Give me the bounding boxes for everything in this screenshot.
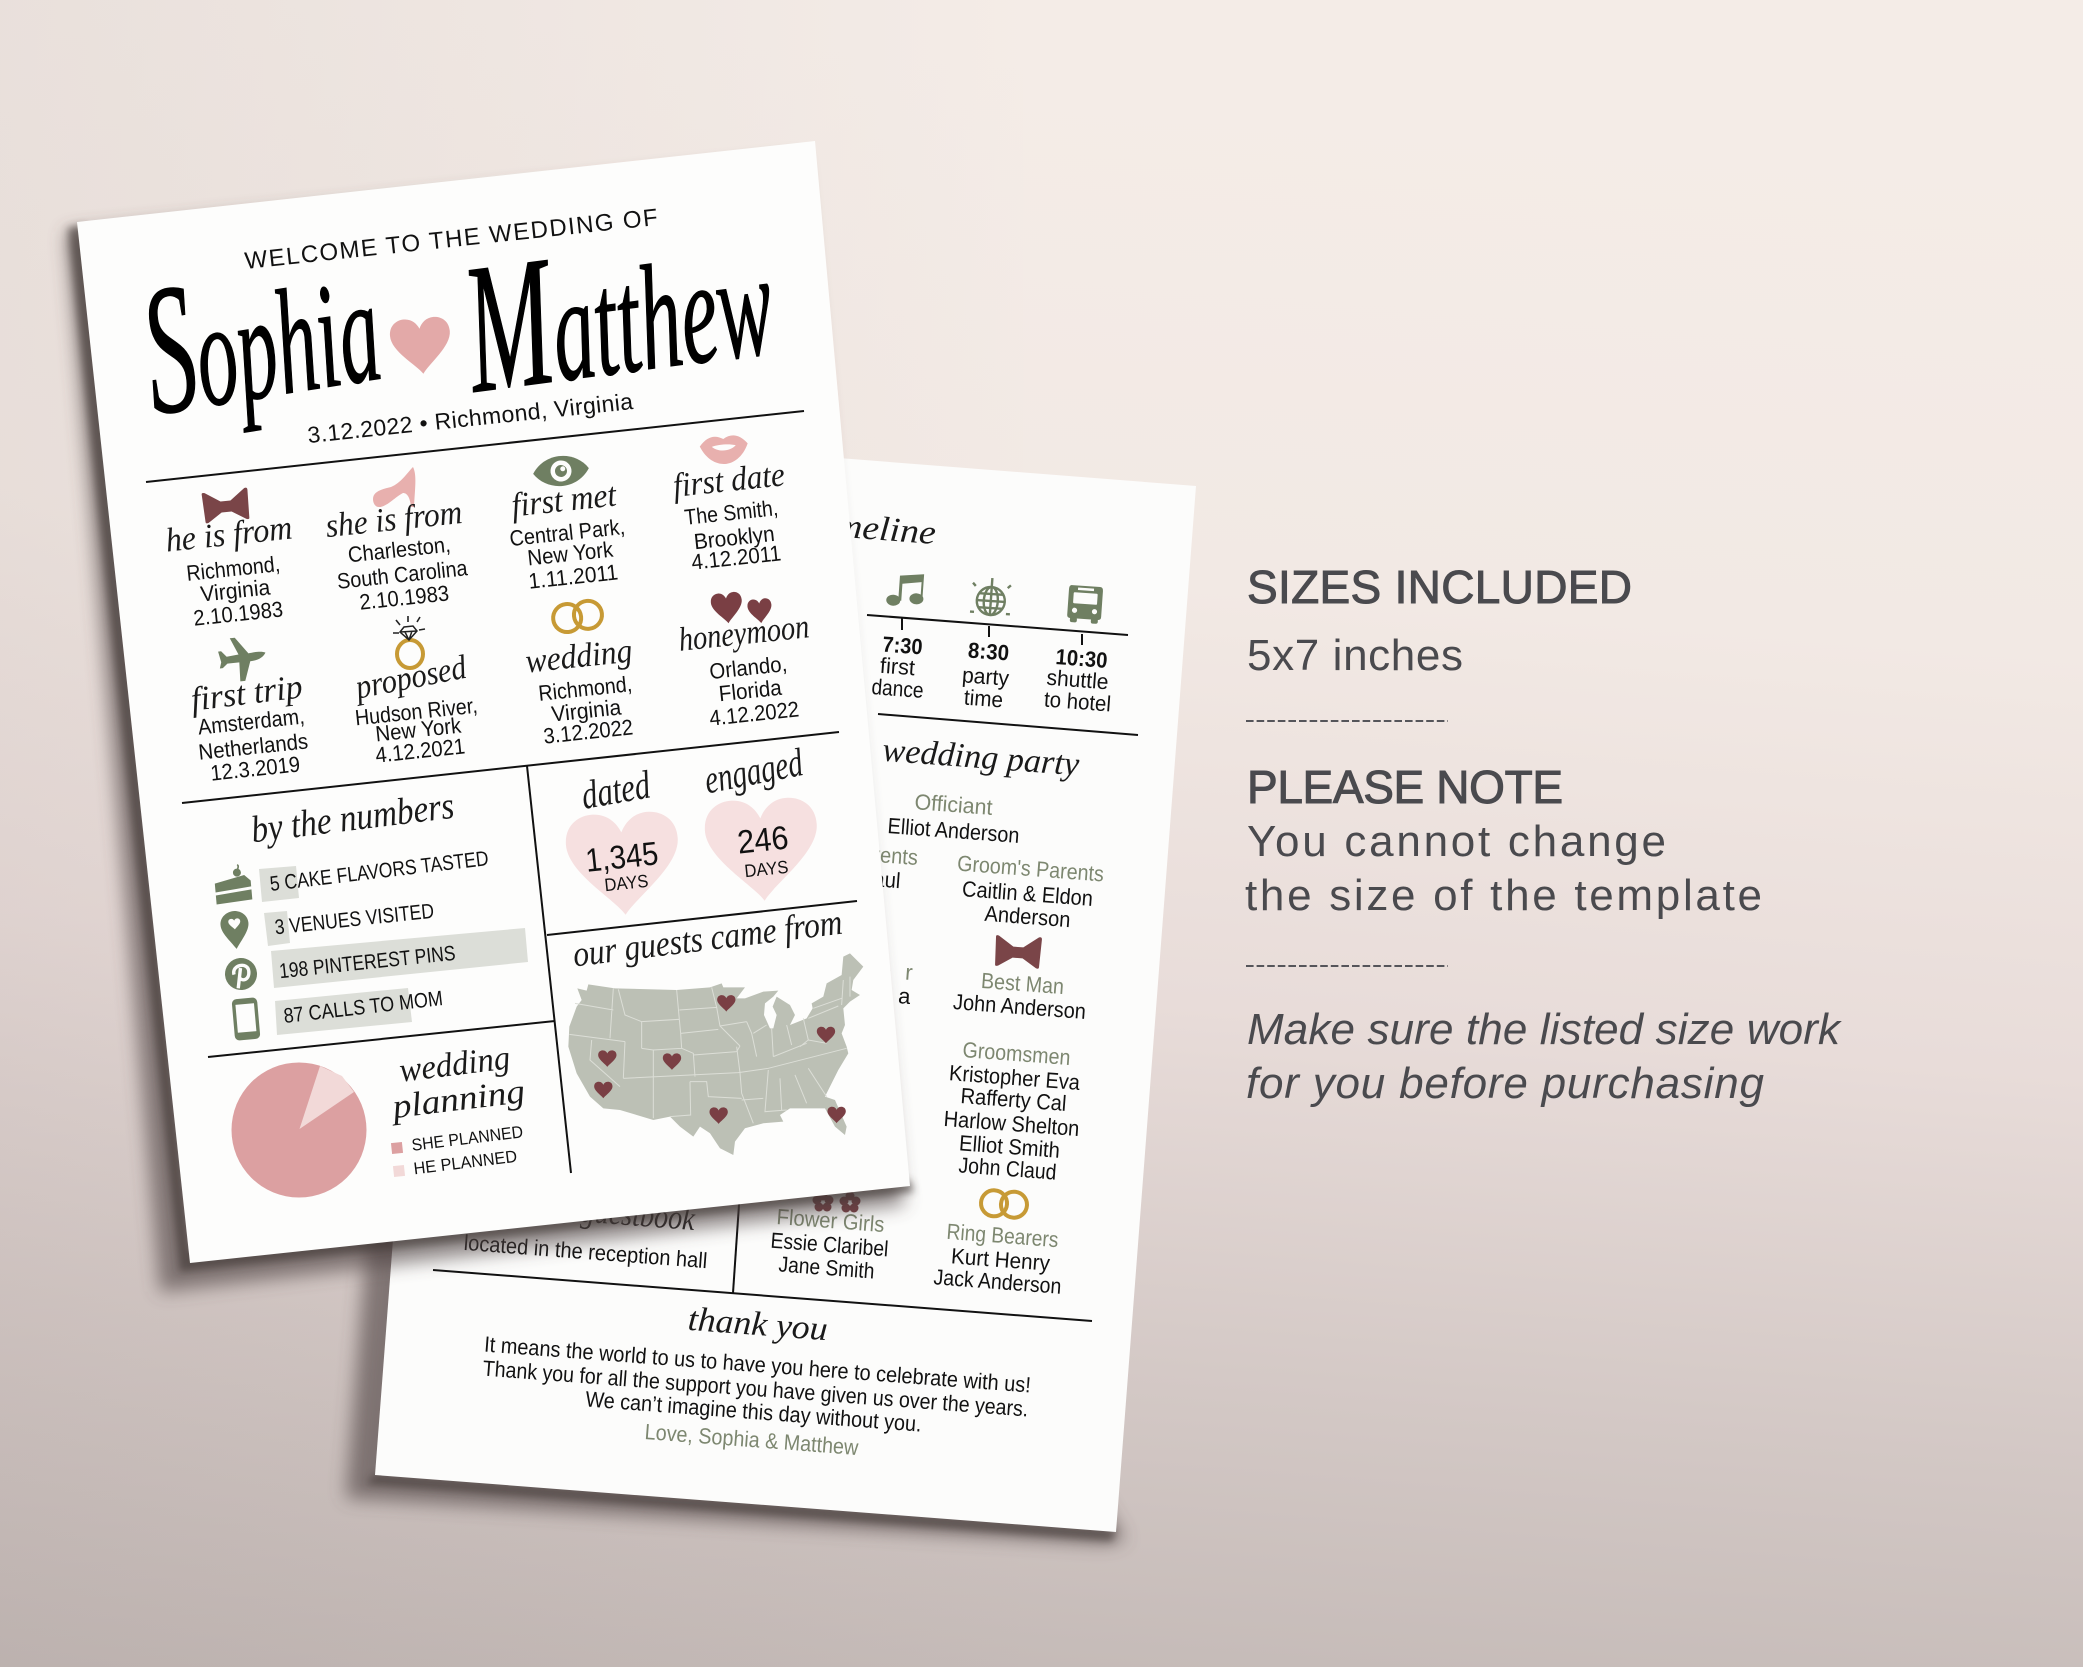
bride's parents: Bride's Parents	[782, 835, 919, 870]
thank you message	[482, 1332, 1032, 1437]
fact: first trip	[189, 635, 309, 786]
fact: first trip: 12.3.2019	[209, 751, 301, 786]
signature: Love, Sophia & Matthew	[644, 1419, 859, 1460]
sizes note	[1245, 561, 1842, 1108]
officiant: Officiant	[914, 789, 993, 820]
officiant	[887, 789, 1020, 848]
groom's parents: Groom's Parents	[956, 851, 1105, 886]
timeline section	[813, 506, 1128, 716]
groomsmen: Groomsmen	[962, 1037, 1071, 1070]
story facts grid	[164, 434, 811, 786]
event: party time: party	[961, 662, 1010, 691]
front card paper	[77, 141, 910, 1263]
fact: first met: New York	[526, 537, 615, 570]
text: cannot change: You cannot change	[1247, 817, 1666, 866]
fact: proposed: 4.12.2021	[374, 733, 466, 768]
icon: pinterest	[224, 957, 258, 991]
heading: wedding planning: planning	[388, 1073, 527, 1126]
front card shadow	[66, 160, 914, 1292]
heading: wedding planning: wedding	[397, 1039, 512, 1090]
icon: bow tie	[994, 934, 1042, 969]
groomsmen: Elliot Smith	[958, 1130, 1061, 1163]
thank you message: It means the world to us to have you here to celebrate with us!	[483, 1332, 1032, 1398]
heading: our guests came from: our guests came from	[571, 902, 844, 974]
stat bars	[259, 866, 528, 1035]
fact: wedding	[524, 599, 634, 749]
heading: timeline: timeline	[813, 506, 937, 552]
heading: dated: dated	[578, 761, 654, 818]
fact: first date: Brooklyn	[693, 521, 776, 554]
fact: first met: Central Park,	[508, 514, 626, 551]
icon: bus	[1067, 585, 1103, 624]
US map	[568, 953, 863, 1155]
text: make sure: for you before purchasing	[1246, 1059, 1765, 1108]
text: make sure: Make sure the listed size work	[1247, 1005, 1842, 1054]
fact: honeymoon: Orlando,	[708, 651, 788, 684]
panel: wedding planning	[232, 1039, 527, 1198]
heart: engaged days	[703, 796, 821, 904]
event: first dance: dance	[871, 674, 924, 703]
fact: first trip: Netherlands	[197, 728, 309, 765]
groomsmen: Rafferty Cal	[960, 1083, 1067, 1116]
fact: he is from: he is from	[164, 510, 294, 560]
fact: he is from: 2.10.1983	[192, 596, 284, 631]
value: 246 days: DAYS	[743, 857, 789, 881]
fact: wedding: wedding	[524, 633, 634, 681]
header	[129, 189, 783, 455]
fact: first trip: Amsterdam,	[197, 704, 306, 740]
fact: proposed: proposed	[351, 649, 470, 707]
groomsmen: Harlow Shelton	[943, 1106, 1080, 1141]
fact: she is from: Charleston,	[347, 532, 452, 567]
ring bearers: Ring Bearers	[946, 1219, 1059, 1252]
value: 1,345 days	[584, 834, 660, 895]
flower girls	[770, 1204, 889, 1284]
icon: music notes	[886, 572, 925, 608]
ring bearers: Kurt Henry	[950, 1243, 1051, 1276]
fact: wedding: Richmond,	[537, 671, 633, 706]
timeline axis	[867, 615, 1128, 645]
flower girls: Essie Claribel	[770, 1228, 889, 1261]
icon: flowers	[812, 1192, 860, 1212]
groom's parents	[956, 851, 1105, 932]
fact: first met	[508, 453, 626, 594]
value: 246 days	[736, 818, 790, 881]
event: shuttle to hotel	[1043, 644, 1112, 716]
guestbook note: sign our guestbook	[480, 1185, 697, 1238]
icon: phone	[233, 999, 259, 1039]
guestbook note: located in the reception hall	[463, 1230, 708, 1273]
maid of honor: Jane Ann a	[792, 975, 912, 1009]
ring bearers: Jack Anderson	[933, 1264, 1062, 1299]
wedding party section	[760, 732, 1105, 1299]
date and place: 3.12.2022 • Richmond, Virginia	[306, 388, 634, 448]
fact: honeymoon	[677, 591, 811, 731]
fact: wedding: 3.12.2022	[542, 714, 634, 749]
fact: she is from: South Carolina	[336, 555, 469, 594]
bride's parents	[782, 835, 919, 893]
groomsmen	[943, 1037, 1082, 1185]
groom's parents: Caitlin & Eldon	[961, 876, 1094, 911]
fact: first date: The Smith,	[683, 495, 779, 530]
fact: first date	[671, 434, 787, 575]
best man: John Anderson	[952, 989, 1087, 1024]
bride's parents: Anna & Paul	[788, 860, 901, 893]
heading: wedding planning	[388, 1039, 527, 1126]
ring bearers	[933, 1219, 1062, 1299]
heading: please note: PLEASE NOTE	[1247, 761, 1563, 813]
flower girls: Flower Girls	[776, 1204, 885, 1237]
fact: she is from: 2.10.1983	[358, 580, 450, 615]
value: 1,345 days: DAYS	[603, 871, 649, 895]
icon: cake	[213, 864, 253, 905]
heading: sizes included: SIZES INCLUDED	[1247, 561, 1632, 613]
fact: proposed	[351, 616, 479, 768]
icon: heart	[389, 316, 453, 376]
pie chart	[232, 1062, 366, 1198]
panel: by the numbers	[213, 785, 528, 1039]
heading: thank you: thank you	[687, 1301, 829, 1348]
legend: HE PLANNED	[413, 1147, 518, 1178]
thank you section	[482, 1301, 1032, 1460]
heading: engaged: engaged	[701, 739, 807, 802]
icon: disco ball	[970, 577, 1012, 616]
back card paper	[375, 428, 1196, 1532]
maid of honor	[760, 949, 913, 1009]
officiant: Elliot Anderson	[887, 813, 1020, 848]
fact: he is from	[164, 487, 294, 631]
groomsmen: John Claud	[958, 1152, 1057, 1185]
panel: guests map	[568, 902, 863, 1155]
fact: wedding: Virginia	[550, 694, 623, 727]
fact: proposed: Hudson River,	[354, 693, 479, 730]
thank you message: We can’t imagine this day without you.	[585, 1386, 923, 1437]
event: party time: time	[963, 685, 1004, 712]
panel: front card	[66, 141, 914, 1292]
icon: rings	[980, 1189, 1028, 1219]
fact: honeymoon: Florida	[718, 675, 784, 706]
welcome line: WELCOME TO THE WEDDING OF	[243, 204, 659, 275]
heart: dated days	[564, 810, 682, 918]
event: shuttle to hotel: to hotel	[1043, 687, 1112, 716]
name: Matthew: Matthew	[451, 189, 783, 433]
legend: SHE PLANNED	[411, 1122, 524, 1155]
icon: map pin	[219, 910, 251, 950]
best man: Best Man	[980, 968, 1065, 999]
groom's parents: Anderson	[984, 901, 1071, 932]
fact: first date: first date	[671, 456, 787, 505]
value: 246 days: 246	[736, 818, 790, 861]
fact: he is from: Richmond,	[185, 551, 281, 586]
groomsmen: Kristopher Eva	[948, 1060, 1082, 1095]
fact: first trip: first trip	[189, 668, 305, 719]
text: size: 5x7 inches	[1247, 631, 1463, 680]
fact: honeymoon: honeymoon	[677, 608, 811, 659]
fact: he is from: Virginia	[199, 574, 272, 607]
maid of honor: Maid of Hono r	[760, 949, 913, 985]
flower girls: Jane Smith	[778, 1251, 875, 1284]
panel: back card	[346, 428, 1196, 1544]
event: party time	[961, 638, 1010, 712]
fact: she is from: she is from	[324, 494, 464, 545]
text: cannot change: the size of the template	[1245, 871, 1762, 920]
event: shuttle to hotel: shuttle	[1046, 665, 1109, 694]
stat: calls to mom: 87 CALLS TO MOM	[282, 987, 444, 1028]
best man	[952, 968, 1087, 1024]
event: shuttle to hotel: 10:30	[1055, 644, 1108, 673]
thank you message: Thank you for all the support you have given us over the years.	[482, 1356, 1029, 1421]
value: 1,345 days: 1,345	[584, 834, 660, 879]
fact: first met: 1.11.2011	[527, 559, 619, 594]
panel: dated and engaged	[564, 739, 821, 918]
event: first dance: first	[879, 653, 916, 680]
fact: first met: first met	[510, 477, 619, 524]
event: party time: 8:30	[967, 638, 1010, 666]
heading: wedding party: wedding party	[881, 732, 1081, 783]
fact: honeymoon: 4.12.2022	[708, 696, 800, 731]
stat: venues: 3 VENUES VISITED	[274, 900, 435, 939]
event: first dance	[871, 632, 924, 703]
text: cannot change	[1245, 817, 1762, 920]
guestbook note	[463, 1185, 708, 1273]
fact: she is from	[324, 467, 469, 615]
stat: pinterest pins: 198 PINTEREST PINS	[278, 942, 457, 983]
stat: cake flavors: 5 CAKE FLAVORS TASTED	[269, 847, 490, 896]
heading: by the numbers: by the numbers	[249, 785, 456, 851]
legend	[391, 1122, 524, 1178]
text: make sure	[1246, 1005, 1842, 1108]
back card shadow	[346, 428, 1125, 1544]
fact: proposed: New York	[374, 713, 463, 746]
fact: first date: 4.12.2011	[690, 540, 782, 575]
name: Sophia: Sophia	[129, 216, 392, 455]
event: first dance: 7:30	[882, 632, 923, 659]
